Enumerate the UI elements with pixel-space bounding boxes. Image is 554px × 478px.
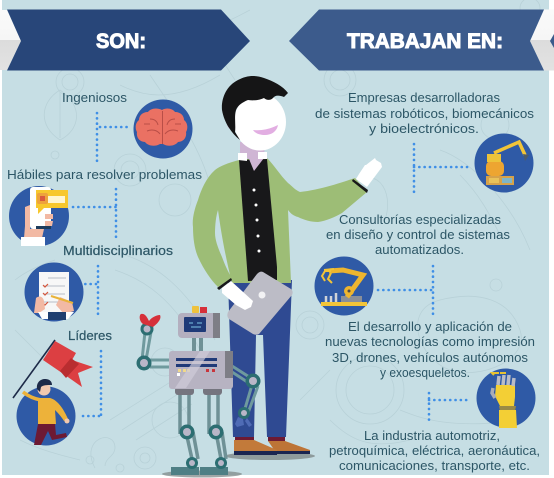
text: Consultorías: Consultorías especializadas	[339, 212, 501, 227]
heading banner: TRABAJAN EN: TRABAJAN EN:	[347, 30, 503, 53]
ear	[227, 117, 235, 129]
icon: robotic arm two	[314, 256, 374, 316]
text: La industria: La industria automotriz,	[364, 428, 500, 443]
right ribbon fold	[530, 10, 554, 478]
heading banner: TRABAJAN EN	[289, 10, 544, 70]
icon: checklist	[24, 262, 84, 322]
shadow under shoes	[225, 452, 315, 460]
icon: leader with flag	[13, 340, 93, 446]
robot head	[178, 306, 220, 338]
black shirt	[239, 159, 277, 281]
text: El desarrollo: El desarrollo y aplicación de	[348, 319, 512, 334]
connector: Líderes	[83, 351, 103, 416]
icon: brain	[134, 100, 192, 158]
text: El desarrollo: 3D, drones, vehículos autónomos	[332, 350, 529, 365]
heading banner: SON: SON:	[96, 30, 146, 53]
robot right arm	[232, 366, 260, 427]
text: Multidisciplinarios: Multidisciplinarios	[63, 243, 174, 258]
hair	[222, 76, 288, 140]
text: Consultorías: en diseño y control de sistemas	[326, 227, 510, 242]
heading banner: SON	[7, 10, 250, 70]
green jacket	[193, 158, 367, 287]
text: El desarrollo	[325, 319, 535, 380]
robot body	[169, 351, 233, 389]
text: Ingeniosos: Ingeniosos	[62, 90, 128, 105]
connector: Empresas	[414, 144, 470, 193]
robot	[136, 306, 260, 478]
text: Empresas	[315, 90, 535, 136]
trousers	[228, 280, 292, 437]
text: La industria	[329, 428, 540, 473]
icon: exoskeleton glove	[476, 368, 536, 428]
text: Hábiles: Hábiles para resolver problemas	[7, 167, 203, 182]
icon: robotic arm one	[474, 134, 534, 192]
text: Consultorías	[326, 212, 510, 257]
text: Empresas: Empresas desarrolladoras	[348, 90, 501, 105]
head	[234, 94, 286, 150]
connector: Multidisciplinarios	[80, 266, 98, 315]
holding hand	[222, 281, 253, 310]
text: La industria: comunicaciones, transporte, etc.	[339, 458, 530, 473]
smile	[253, 125, 278, 135]
robot neck	[192, 337, 203, 352]
text: La industria: petroquímica, eléctrica, aeronáutica,	[329, 443, 540, 458]
text: Empresas: y bioelectrónicos.	[369, 121, 479, 136]
shoes	[234, 437, 310, 455]
tablet	[227, 272, 293, 335]
connector: Hábiles	[73, 189, 116, 240]
connector: El desarrollo	[429, 393, 470, 420]
left ribbon fold	[0, 10, 21, 70]
person figure	[193, 76, 382, 460]
neck and collar	[240, 142, 265, 171]
text: Consultorías: automatizados.	[375, 242, 464, 257]
robot legs	[171, 387, 228, 475]
text: Empresas: de sistemas robóticos, biomecánicos	[315, 106, 535, 121]
robot left arm	[136, 314, 172, 370]
connector: Consultorías	[378, 266, 433, 315]
text: Líderes: Líderes	[68, 328, 112, 343]
icon: phone with lock	[9, 186, 69, 246]
connector: Ingeniosos	[97, 113, 128, 163]
text: El desarrollo: nuevas tecnologías como impresión	[325, 334, 535, 349]
raised hand	[356, 158, 382, 187]
text: El desarrollo: y exoesqueletos.	[380, 365, 470, 380]
floor shadow	[162, 470, 242, 478]
